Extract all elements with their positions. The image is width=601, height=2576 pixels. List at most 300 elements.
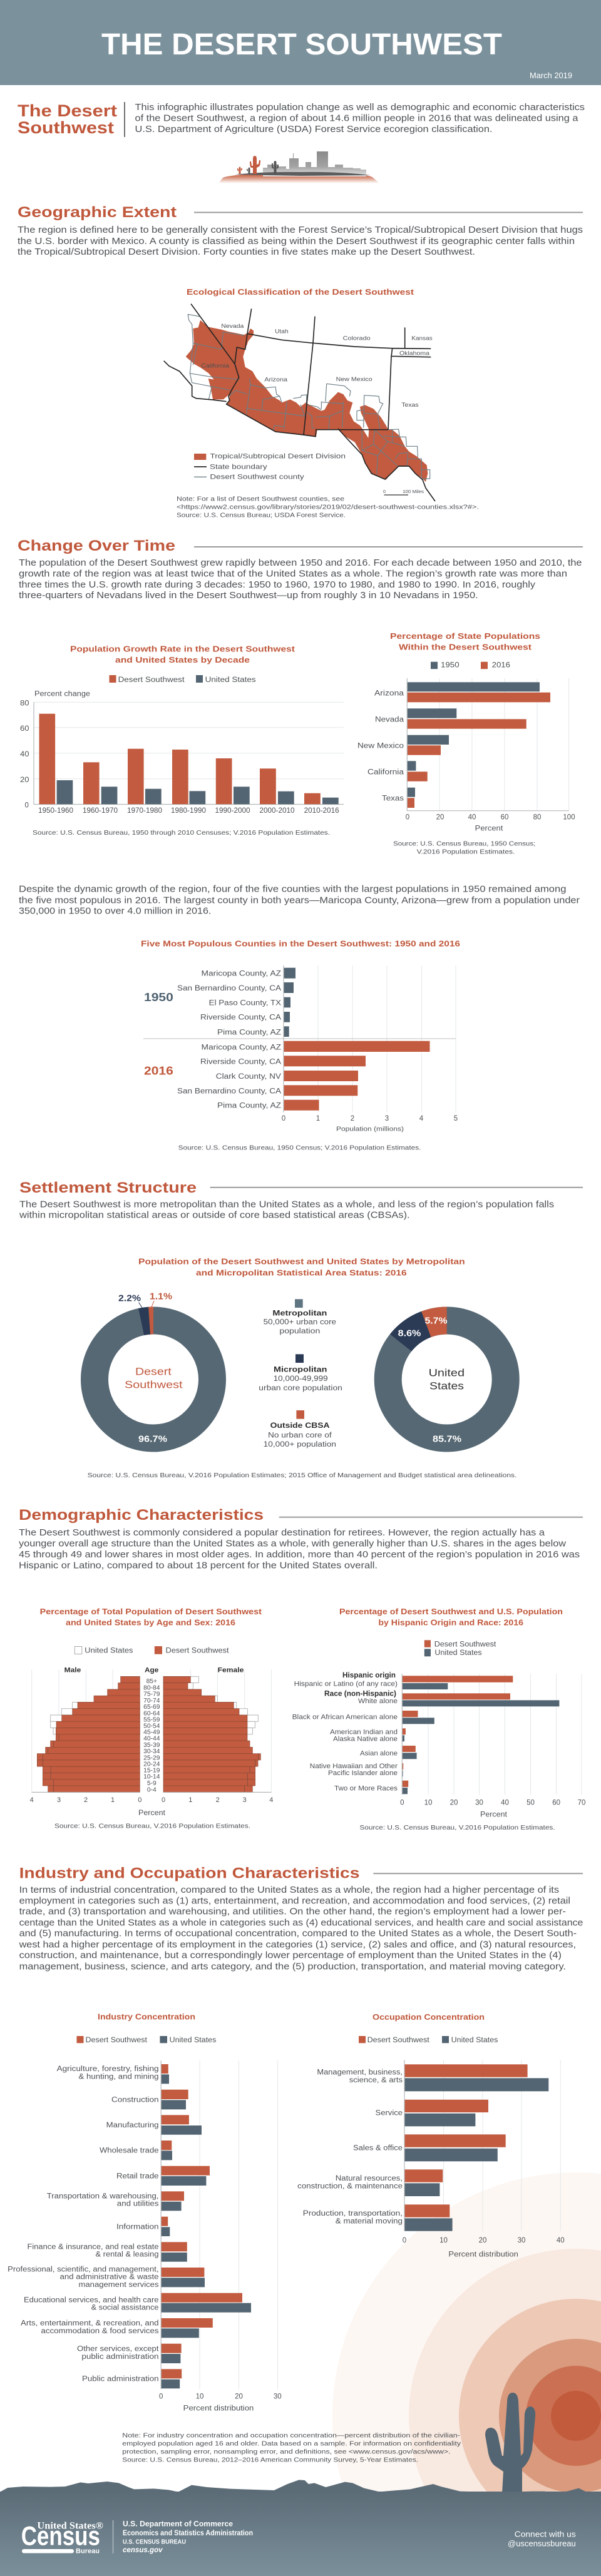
category labels: Wholesale trade [100,2147,159,2154]
chart title: metropolitan status: and Micropolitan Statistical Area Status: 2016 [196,1268,407,1277]
category labels: Construction [111,2096,159,2104]
legend: 1950 [441,662,460,669]
legend: outside CBSA [264,1410,336,1448]
category labels: Retail trade [116,2172,159,2180]
legend: micropolitan: 10,000-49,999 [274,1375,328,1383]
age labels: 5-9 [147,1780,157,1787]
state boundaries [164,304,435,501]
grid [143,965,456,1112]
state labels: Nevada [375,716,404,723]
social text [508,2530,576,2548]
county labels: Clark County, NV [216,1073,281,1081]
source: Source: U.S. Census Bureau, V.2016 Population Estimates. [359,1824,555,1831]
x axis ticks: 40 [557,2237,565,2244]
age labels: 75-79 [143,1691,160,1698]
county labels: Riverside County, CA [200,1014,281,1022]
chart: industry concentration [8,2012,282,2412]
state labels: Kansas [411,335,433,341]
age labels [143,1678,160,1793]
column headers [64,1666,244,1674]
source: Source: U.S. Census Bureau, V.2016 Population Estimates. [54,1823,250,1830]
text: demographic characteristics: 45 through 49 and lower shares in most older ages. In addition, more than 40 percent of the region’s population in 2016 was [19,1550,580,1560]
map note and source: Note: For a list of Desert Southwest counties, see [177,496,344,503]
donut: Desert Southwest: Desert [135,1365,172,1377]
y axis and grid: 60 [20,725,29,733]
x axis ticks: 5 [454,1115,458,1123]
category labels: Arts, entertainment, & recreation, and [21,2320,159,2328]
footer panel [0,2480,601,2576]
x axis labels: 1980-1990 [171,807,206,815]
legend: outside CBSA: 10,000+ population [264,1441,336,1448]
legend: outside CBSA: Outside CBSA [270,1422,330,1430]
tick labels [30,1796,273,1804]
column headers: Age [145,1666,158,1674]
category labels: Manufacturing [106,2122,159,2129]
county boundaries [188,314,430,479]
category labels: Information [116,2223,159,2231]
source [393,840,535,856]
x axis ticks: 0 [406,814,409,822]
age labels: 30-34 [143,1748,160,1755]
chart title: Population Growth Rate in the Desert Southwest [70,644,295,654]
x axis ticks: Percent [475,825,503,833]
text: demographic characteristics: Hispanic or Latino, compared to about 18 percent for the United States overall. [19,1560,378,1571]
age labels: 55-59 [143,1716,160,1723]
x axis ticks: 30 [274,2393,282,2400]
text: geographic extent [18,225,583,257]
category labels: Other services, except [77,2346,159,2353]
category labels: Hispanic or Latino (of any race) [294,1680,398,1688]
x axis ticks [159,2393,282,2412]
year labels: 1950 [144,991,173,1004]
state labels: Arizona [264,376,287,382]
bars [402,1674,559,1795]
chart: five most populous counties [141,939,460,1151]
bars [39,714,339,804]
chart title: Five Most Populous Counties in the Desert Southwest: 1950 and 2016 [141,939,460,949]
text: demographic characteristics: younger overall age structure than the United States as a whole, with generally higher than U.S. shares in the ages below [19,1539,567,1549]
category labels: Transportation & warehousing, [47,2192,159,2200]
state labels: Arizona [374,690,404,698]
tick labels: 2 [84,1796,88,1804]
text: county growth: Despite the dynamic growth of the region, four of the five counties with the largest populations in 1950 remained among [19,885,566,895]
text: county growth: 350,000 in 1950 to over 4.0 million in 2016. [19,907,211,917]
text: industry and occupation: west had a higher percentage of its employment in the categories (1) service, (2) sales and office, and (3) natural resources, [18,1940,576,1950]
text: settlement structure [19,1199,554,1221]
chart title: ecological classification: Ecological Classification of the Desert Southwest [187,287,414,297]
text: industry and occupation: trade, and (3) transportation and warehousing, and utilities. On the other hand, the region’s employment had a lower per- [19,1907,566,1917]
category labels: Finance & insurance, and real estate [28,2243,159,2251]
text: change over time: three-quarters of Nevadans lived in the Desert Southwest—up from roughly 3 in 10 Nevadans in 1950. [19,591,478,601]
text: industry and occupation: In terms of industrial concentration, compared to the United States as a whole, the region had a higher percentage of its [19,1885,559,1895]
state labels [201,323,433,408]
category labels: Service [376,2110,403,2117]
county labels: Maricopa County, AZ [202,1044,281,1051]
bars [284,965,429,1112]
age labels: 45-49 [143,1729,160,1736]
state labels: Utah [275,328,289,335]
map legend [194,453,346,481]
x axis labels: 2000-2010 [259,807,294,815]
year labels [144,991,173,1077]
text: industry and occupation [18,1885,583,1972]
state labels: California [367,769,404,776]
x axis ticks: 80 [533,814,541,822]
x axis ticks: 20 [436,814,444,822]
social text: Connect with us [515,2530,576,2539]
chart title [390,631,540,651]
legend [74,1646,229,1654]
legend: United States [170,2037,217,2044]
agency text [123,2521,253,2554]
donut: Desert Southwest: 96.7% [138,1433,167,1444]
county labels: San Bernardino County, CA [177,1087,281,1095]
intro text: of the Desert Southwest, a region of about 14.6 million people in 2016 that was delineated using a [135,114,579,124]
x axis ticks: 30 [475,1800,483,1807]
note and source: industry and occupation: Source: U.S. Census Bureau, 2012–2016 American Community Survey, 5-Year Estimates. [122,2456,418,2464]
map: ecological classification [164,304,435,501]
category labels: Hispanic origin [342,1672,396,1679]
category labels [297,2069,403,2225]
source: V.2016 Population Estimates. [417,848,515,856]
text: industry and occupation: and (5) manufacturing. In terms of occupational concentration, compared to the United States as a whole, the Desert South- [19,1929,577,1939]
x axis ticks: 60 [552,1800,560,1807]
legend: micropolitan [259,1354,342,1392]
intro heading [18,101,125,137]
x axis labels: 1960-1970 [83,807,118,815]
agency text: U.S. CENSUS BUREAU [123,2538,186,2545]
chart title: Percentage of Total Population of Desert Southwest [40,1607,262,1616]
chart title: by Hispanic Origin and Race: 2016 [378,1618,523,1627]
intro heading: Southwest [18,118,114,137]
chart title [70,644,295,664]
legend: Desert Southwest [85,2037,148,2044]
map legend: State boundary [210,463,267,471]
year labels: 2016 [144,1065,173,1077]
text: industry and occupation: employment in categories such as (1) arts, entertainment, and recreation, and accommodation and food services, (2) retail [19,1896,570,1906]
x axis ticks: 40 [501,1800,509,1807]
age labels: 65-69 [143,1704,160,1711]
text: geographic extent: the U.S. border with Mexico. A county is classified as being within the Desert Southwest if its geographic center falls within [18,237,575,247]
category labels: and administrative & waste [60,2274,159,2281]
donut: United States: 5.7% [424,1316,447,1326]
x axis labels: 1990-2000 [215,807,250,815]
text: settlement structure: The Desert Southwest is more metropolitan than the United States as a whole, and less of the region’s population falls [19,1199,554,1209]
heading: Change Over Time: Change Over Time [18,537,175,554]
x axis ticks [403,2237,565,2258]
chart title [339,1607,563,1627]
intro text [135,103,585,135]
x axis ticks [282,1115,458,1133]
grid [439,678,569,811]
state labels: Colorado [343,335,371,341]
state labels: California [201,363,229,369]
map note and source: Source: U.S. Census Bureau; USDA Forest Service. [177,512,346,519]
x axis ticks: 1 [316,1115,320,1123]
category labels: Natural resources, [336,2175,403,2182]
county labels: El Paso County, TX [209,999,281,1007]
county labels: Maricopa County, AZ [202,970,281,977]
x axis ticks: 20 [235,2393,243,2400]
county labels [177,970,281,1110]
chart title: metropolitan status [138,1257,465,1277]
category labels: Two or More Races [334,1784,398,1792]
category labels: Agriculture, forestry, fishing [57,2065,158,2073]
category labels: Management, business, [317,2069,403,2077]
female US lines inside bars [245,1754,259,1792]
legend: Desert Southwest [434,1641,496,1648]
chart title: Percentage of Desert Southwest and U.S. Population [339,1607,563,1616]
age labels: 10-14 [143,1774,160,1781]
chart: percentage of state populations [357,631,575,856]
chart title: Occupation Concentration [372,2012,485,2022]
category labels: management services [79,2281,159,2289]
icon: saguaro cactus [485,2393,535,2493]
chart title: and United States by Decade [115,655,250,664]
map legend: Desert Southwest county [210,473,304,481]
mountain silhouette [0,2480,601,2495]
category labels: science, & arts [349,2077,403,2084]
text: demographic characteristics [19,1528,580,1571]
age labels: 70-74 [143,1698,160,1704]
state labels: New Mexico [357,743,404,750]
grid [200,2060,277,2389]
text: industry and occupation: centage than the United States as a whole in categories such as (4) educational services, and health care and social assistance [19,1918,583,1928]
legend: Desert Southwest [118,676,185,684]
donut: Desert Southwest: 2.2% [118,1293,141,1303]
tick labels: 4 [30,1796,34,1804]
donut: Desert Southwest [95,1291,212,1444]
agency text: census.gov [123,2547,163,2554]
text: industry and occupation: management, business, science, and arts category, and the (5) production, transportation, and material moving category. [19,1962,566,1972]
donut: United States [388,1316,506,1444]
tick labels: 3 [243,1796,247,1804]
category labels: Educational services, and health care [24,2296,159,2304]
legend: Desert Southwest [367,2037,430,2044]
category labels: accommodation & food services [41,2328,159,2335]
donut: Desert Southwest: 1.1% [150,1291,172,1302]
x axis ticks [406,814,575,833]
x axis ticks: 30 [518,2237,525,2244]
x axis ticks: 0 [159,2393,163,2400]
category labels: & rental & leasing [95,2251,159,2258]
axis label: Percent [138,1810,166,1817]
y axis and grid: 20 [20,776,29,784]
state labels: Texas [401,402,419,408]
state labels: Nevada [221,323,244,329]
category labels: Asian alone [360,1750,398,1758]
x axis ticks: 20 [479,2237,486,2244]
source: Source: U.S. Census Bureau, 1950 through 2010 Censuses; V.2016 Population Estimates. [33,829,330,837]
legend: United States [85,1647,133,1654]
age labels: 35-39 [143,1742,160,1749]
x axis ticks: 50 [527,1800,535,1807]
legend: Desert Southwest [165,1647,229,1654]
note and source: industry and occupation [122,2432,461,2464]
chart: Hispanic origin and race [292,1607,585,1831]
y axis and grid [20,691,344,810]
header banner [0,0,601,85]
x axis ticks [400,1800,585,1818]
date: March 2019 [530,71,572,80]
text: change over time: growth rate of the region was at least twice that of the United States as a whole. The region’s growth rate was more than [19,569,567,579]
x axis ticks: 0 [403,2237,406,2244]
Census Bureau logo: United States® [37,2521,103,2532]
county labels: Pima County, AZ [217,1102,281,1110]
x axis ticks: Population (millions) [336,1125,404,1133]
age labels: 40-44 [143,1736,160,1743]
category labels: & social assistance [91,2304,159,2312]
tick labels: 4 [269,1796,273,1804]
chart: occupation concentration [297,2012,565,2258]
state labels: New Mexico [336,376,372,382]
age labels: 20-24 [143,1761,160,1768]
age labels: 25-29 [143,1754,160,1761]
chart: population pyramid [30,1607,273,1830]
heading: Demographic Characteristics: Demographic Characteristics [19,1507,264,1524]
x axis ticks: 40 [468,814,476,822]
chart title: metropolitan status: Population of the Desert Southwest and United States by Metropolitan [138,1257,465,1266]
chart: population growth rate by decade [20,644,344,837]
x axis ticks: Percent distribution [448,2251,518,2258]
category labels: Sales & office [353,2145,403,2152]
chart title [40,1607,262,1627]
tick labels: 1 [188,1796,192,1804]
x axis ticks: 70 [578,1800,585,1807]
x axis labels: 1950-1960 [38,807,73,815]
social text: @uscensusbureau [508,2539,576,2548]
category labels: American Indian and [330,1729,398,1736]
legend: metropolitan: population [279,1328,320,1335]
donut: United States: States [429,1380,464,1392]
x axis ticks: 0 [282,1115,285,1123]
donut: Desert Southwest: Southwest [125,1378,183,1390]
category labels [8,2065,159,2383]
intro text: U.S. Department of Agriculture (USDA) Forest Service ecoregion classification. [135,125,492,135]
category labels: Pacific Islander alone [328,1769,398,1777]
heading: Geographic Extent: Geographic Extent [18,204,177,221]
x axis ticks: 2 [351,1115,354,1123]
map note and source: <https://www2.census.gov/library/stories/2019/02/desert-southwest-counties.xlsx?#>. [177,504,479,511]
text: geographic extent: The region is defined here to be generally consistent with the Forest Service’s Tropical/Subtropical Desert Division that hugs [18,225,583,235]
chart title: Industry Concentration [98,2012,195,2022]
x axis ticks: 4 [419,1115,424,1123]
legend: United States [205,676,256,684]
category labels [292,1672,398,1792]
age labels: 50-54 [143,1723,160,1730]
x axis ticks: 10 [439,2237,448,2244]
county labels: Riverside County, CA [200,1058,281,1066]
legend: United States [434,1649,482,1657]
category labels: Race (non-Hispanic) [324,1691,396,1698]
bars [407,682,550,808]
male red bars [37,1676,140,1792]
grid [428,1674,582,1795]
text: county growth [19,885,580,917]
footer background [0,2492,601,2576]
x axis ticks: Percent [480,1811,508,1818]
grid [32,1669,271,1792]
male US outlines [51,1702,140,1734]
donut: United States: United [429,1367,465,1379]
text: county growth: the five most populous in 2016. The largest county in both years—Maricopa County, Arizona—grew from a population under [19,895,580,905]
legend: micropolitan: urban core population [259,1385,342,1392]
x axis labels: 1970-1980 [127,807,162,815]
county labels: Pima County, AZ [217,1029,281,1036]
category labels: Native Hawaiian and Other [310,1763,398,1770]
tick labels: 3 [57,1796,61,1804]
y axis and grid: 0 [25,802,29,810]
tick labels: 0 [138,1796,141,1804]
source: settlement: Source: U.S. Census Bureau, V.2016 Population Estimates; 2015 Office of Management and Budget statistical area delineations. [88,1472,516,1479]
x axis ticks: 0 [400,1800,404,1807]
y axis and grid: 80 [20,700,29,707]
note and source: industry and occupation: employed population aged 16 and older. Data based on a sample. For information on confidentiality [122,2440,461,2448]
map note and source [177,496,479,519]
age labels: 80-84 [143,1684,160,1691]
donut: United States: 85.7% [433,1433,461,1444]
category labels: Production, transportation, [303,2210,403,2217]
category labels: Public administration [82,2376,159,2383]
category labels: White alone [358,1698,398,1705]
category labels: & hunting, and mining [79,2073,159,2080]
female US outlines [163,1676,258,1734]
tick labels: 1 [111,1796,115,1804]
illustration: setting sun [332,2172,601,2576]
text: demographic characteristics: The Desert Southwest is commonly considered a popular destination for retirees. However, the region actually has a [19,1528,545,1538]
legend [359,2036,498,2044]
text: settlement structure: within micropolitan statistical areas or outside of core based statistical areas (CBSAs). [19,1211,410,1221]
legend [109,675,256,684]
y axis and grid: Percent change [34,691,90,698]
text: change over time: three times the U.S. growth rate during 3 decades: 1950 to 1960, 1970 to 1980, and 1980 to 1990. In 2016, roughly [19,580,536,590]
legend: United States [451,2037,498,2044]
category labels: public administration [81,2353,159,2361]
x axis ticks: Percent distribution [183,2405,254,2412]
intro heading: The Desert [18,101,117,120]
column headers: Male [64,1666,81,1674]
text: change over time [19,558,582,601]
x axis ticks: 10 [196,2393,203,2400]
age labels: 15-19 [143,1767,160,1774]
age labels: 0-4 [147,1786,157,1793]
state labels [357,690,404,803]
column headers: Female [218,1666,244,1674]
grid [443,2060,560,2231]
map scale bar: 100 Miles [403,490,424,494]
category labels: and utilities [117,2200,159,2207]
x axis ticks: 100 [563,814,575,822]
note and source: industry and occupation: Note: For industry concentration and occupation concentration—percent distribution of the civilian- [122,2432,460,2440]
map scale bar [383,490,424,495]
x axis ticks: 10 [424,1800,432,1807]
donut legend [259,1299,342,1448]
legend [424,1640,496,1657]
map legend: Tropical/Subtropical Desert Division [210,453,346,461]
legend [431,662,510,669]
chart title: and United States by Age and Sex: 2016 [66,1618,235,1627]
female red bars [163,1676,260,1792]
state labels: Texas [382,795,404,803]
bars [404,2060,548,2231]
text: geographic extent: the Tropical/Subtropical Desert Division. Forty counties in five states make up the Desert Southwest. [18,247,475,257]
legend: metropolitan: 50,000+ urban core [264,1319,336,1326]
category labels: Professional, scientific, and management, [8,2266,159,2274]
x axis ticks: 60 [501,814,508,822]
agency text: Economics and Statistics Administration [123,2530,253,2537]
source: Source: U.S. Census Bureau, 1950 Census; [393,840,535,848]
y axis and grid: 40 [20,751,29,758]
